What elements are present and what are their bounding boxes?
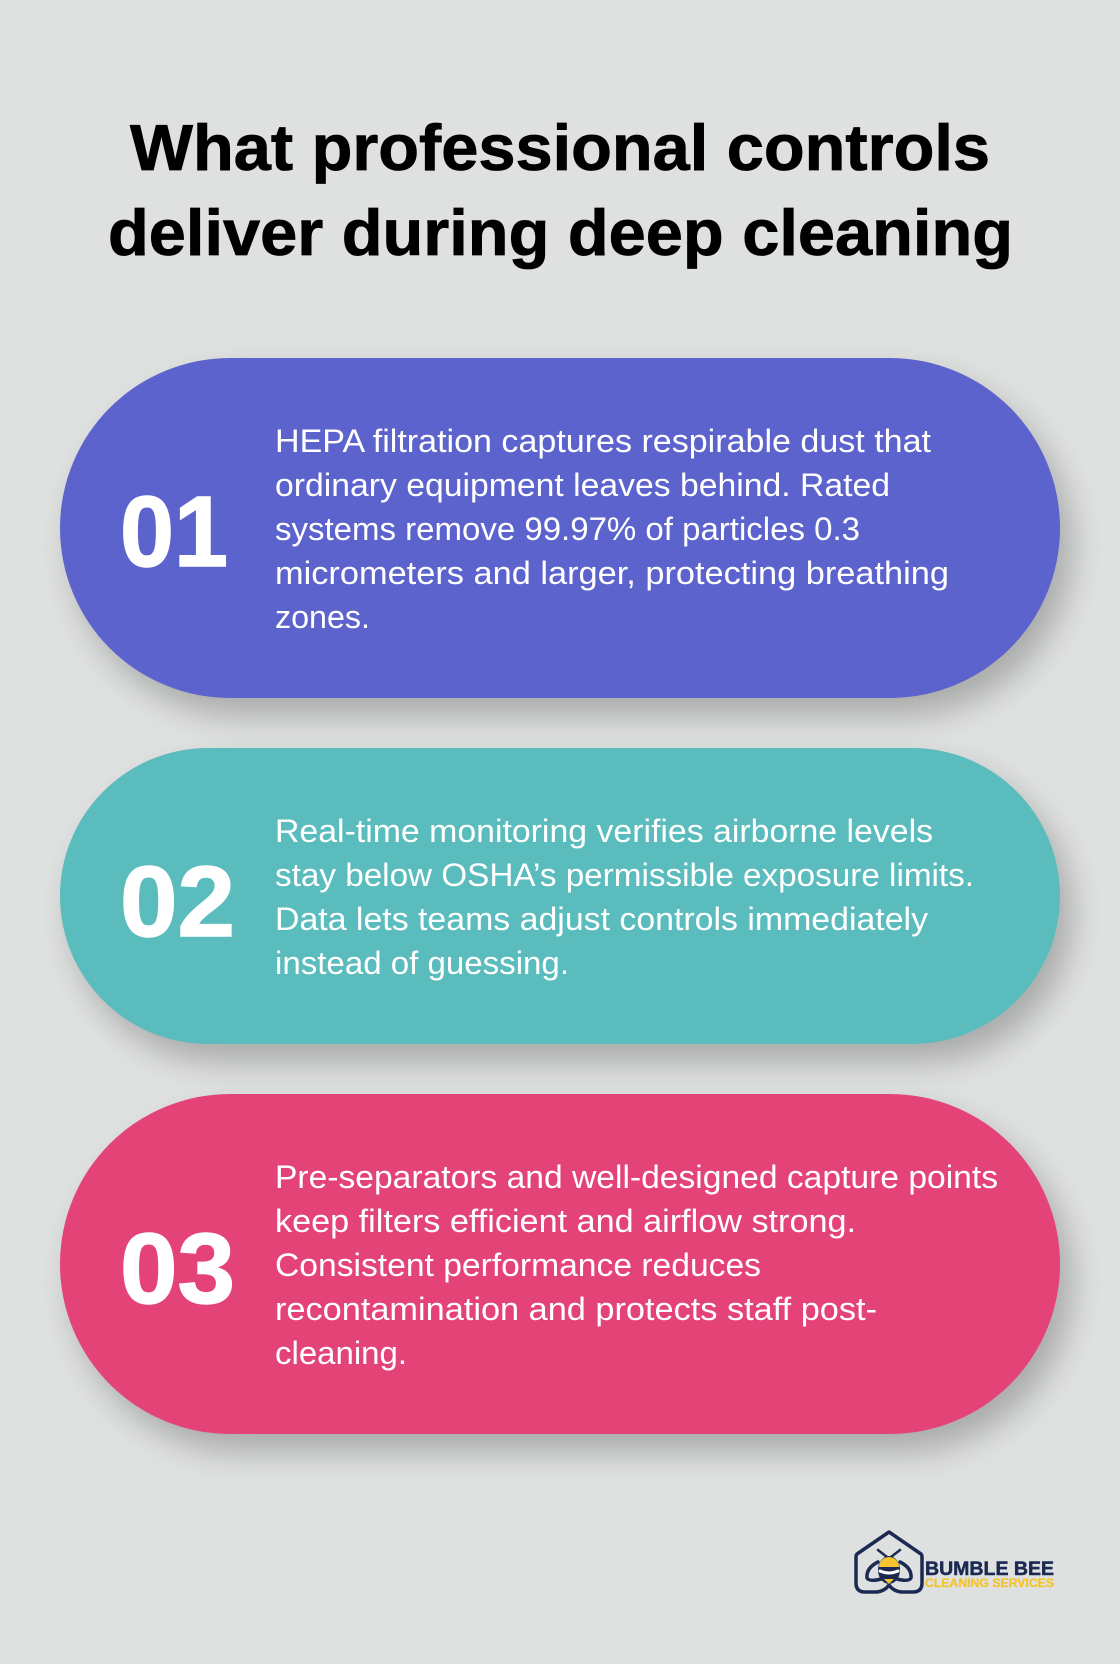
step 02 text: stay below OSHA’s permissible exposure limits.: [275, 857, 974, 893]
panel: step 01: [60, 358, 1072, 716]
step 03 text: cleaning.: [275, 1335, 407, 1371]
step number 03: 03: [120, 1213, 235, 1325]
step 01 text: systems remove 99.97% of particles 0.3: [275, 511, 860, 547]
step 02 text: instead of guessing.: [275, 945, 569, 981]
logo: Bumble Bee Cleaning Services: [856, 1532, 1054, 1592]
step 02 text: [275, 813, 974, 981]
step 03 text: recontamination and protects staff post-: [275, 1291, 877, 1327]
icon: house with bee: [856, 1532, 922, 1592]
panel: step 02: [60, 748, 1072, 1062]
logo tagline: CLEANING SERVICES: [925, 1576, 1054, 1590]
step number 02: 02: [120, 846, 235, 958]
title: What professional controls: [130, 111, 990, 184]
step 03 text: Consistent performance reduces: [275, 1247, 761, 1283]
title: [108, 111, 1013, 269]
step 01 text: [275, 423, 949, 635]
step 02 text: Real-time monitoring verifies airborne levels: [275, 813, 933, 849]
step 03 text: keep filters efficient and airflow strong.: [275, 1203, 856, 1239]
step number 01: 01: [120, 476, 228, 588]
step 01 text: ordinary equipment leaves behind. Rated: [275, 467, 890, 503]
step 01 text: zones.: [275, 599, 370, 635]
panel: step 03: [60, 1094, 1072, 1452]
step 01 text: HEPA filtration captures respirable dust that: [275, 423, 931, 459]
step 01 text: micrometers and larger, protecting breathing: [275, 555, 949, 591]
title: deliver during deep cleaning: [108, 196, 1013, 269]
step 03 text: Pre-separators and well-designed capture points: [275, 1159, 998, 1195]
step 02 text: Data lets teams adjust controls immediately: [275, 901, 928, 937]
step 03 text: [275, 1159, 998, 1371]
logo wordmark: BUMBLE BEE: [925, 1559, 1054, 1580]
